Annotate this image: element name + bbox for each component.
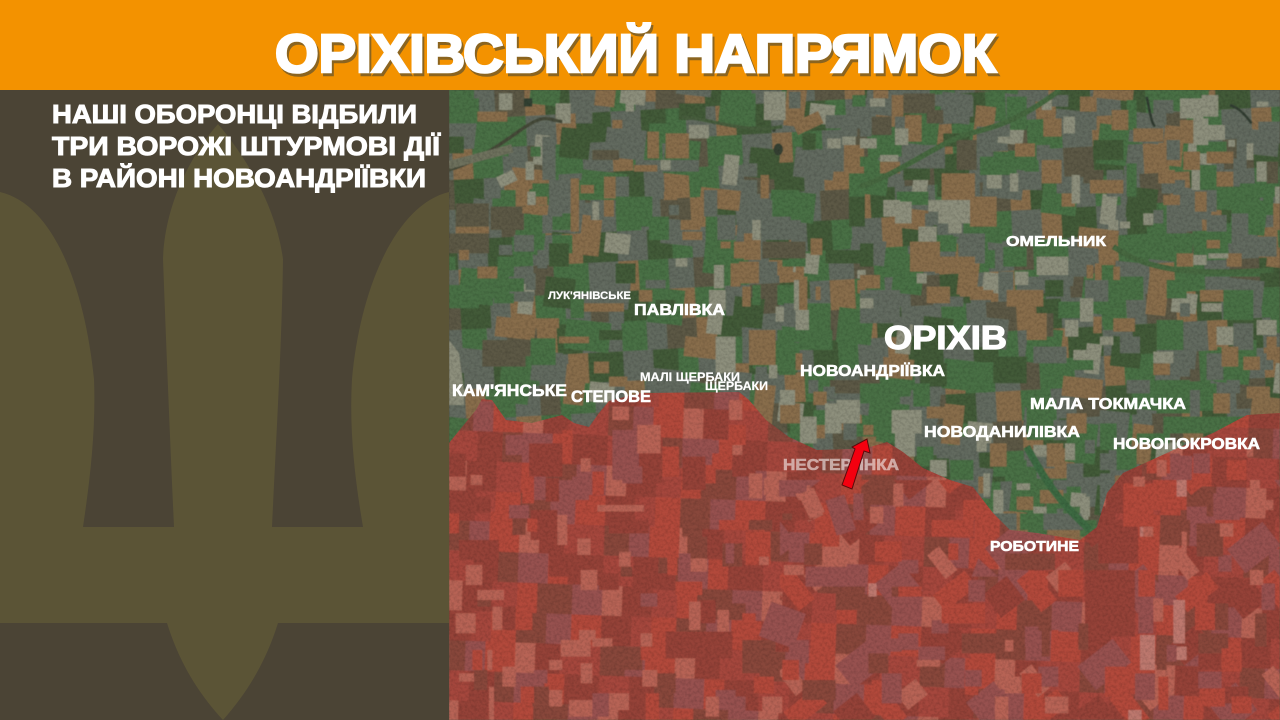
label: НОВОАНДРІЇВКА: НОВОАНДРІЇВКА bbox=[800, 362, 945, 380]
panel: left background bbox=[0, 90, 449, 720]
map: satellite fields with occupied zone bbox=[449, 90, 1280, 720]
label: НОВОПОКРОВКА: НОВОПОКРОВКА bbox=[1113, 436, 1260, 453]
label: РОБОТИНЕ: РОБОТИНЕ bbox=[990, 538, 1079, 555]
texture: satellite grain bbox=[449, 90, 1280, 720]
text: main statement bbox=[52, 99, 441, 193]
text: main statement: НАШІ ОБОРОНЦІ ВІДБИЛИ bbox=[52, 99, 417, 129]
label: ОМЕЛЬНИК: ОМЕЛЬНИК bbox=[1006, 233, 1107, 250]
header band bbox=[0, 0, 1280, 90]
label: КАМ'ЯНСЬКЕ: КАМ'ЯНСЬКЕ bbox=[452, 381, 567, 400]
label: МАЛА ТОКМАЧКА: МАЛА ТОКМАЧКА bbox=[1030, 396, 1186, 413]
arrow: enemy assault direction bbox=[842, 439, 870, 489]
text: main statement: ТРИ ВОРОЖІ ШТУРМОВІ ДІЇ bbox=[52, 131, 441, 161]
label: МАЛІ ЩЕРБАКИ: МАЛІ ЩЕРБАКИ bbox=[640, 370, 740, 384]
label: ОРІХІВ: ОРІХІВ bbox=[884, 319, 1007, 356]
veil: softens field contrast bbox=[449, 90, 1280, 540]
map: occupied zone red overlay bbox=[449, 380, 1280, 720]
label: ЛУК'ЯНІВСЬКЕ: ЛУК'ЯНІВСЬКЕ bbox=[548, 290, 631, 302]
label: НОВОДАНИЛІВКА: НОВОДАНИЛІВКА bbox=[924, 424, 1080, 441]
map: central fields above front line bbox=[780, 380, 1270, 537]
label: НЕСТЕРЯНКА: НЕСТЕРЯНКА bbox=[783, 457, 899, 474]
label: ПАВЛІВКА: ПАВЛІВКА bbox=[634, 302, 725, 319]
title: ОРІХІВСЬКИЙ НАПРЯМОК bbox=[275, 23, 997, 84]
veil: softens occupied zone contrast bbox=[449, 380, 1280, 720]
icon: trident emblem watermark bbox=[0, 124, 449, 720]
title: ОРІХІВСЬКИЙ НАПРЯМОК bbox=[277, 26, 999, 87]
map: north-west fields bbox=[449, 90, 866, 405]
label: ЩЕРБАКИ: ЩЕРБАКИ bbox=[705, 379, 768, 393]
river: western valley bbox=[449, 119, 562, 170]
text: main statement: В РАЙОНІ НОВОАНДРІЇВКИ bbox=[52, 163, 426, 193]
map: north-east fields bbox=[860, 90, 1280, 387]
label: СТЕПОВЕ: СТЕПОВЕ bbox=[571, 387, 651, 406]
